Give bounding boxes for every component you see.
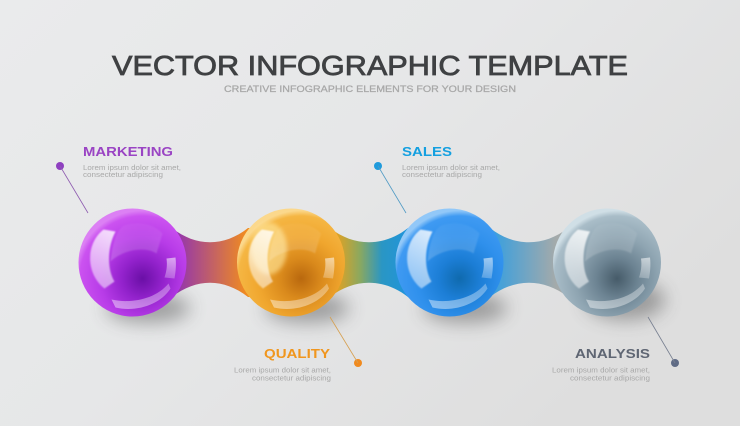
marketing pointer	[56, 162, 88, 213]
quality pointer	[330, 317, 362, 367]
marketing body: consectetur adipiscing	[83, 172, 163, 179]
analysis body: Lorem ipsum dolor sit amet,	[552, 368, 650, 374]
sales pointer	[374, 162, 406, 213]
marketing body	[83, 165, 181, 179]
callout: marketing	[56, 144, 181, 213]
quality heading: QUALITY	[264, 346, 330, 361]
sphere: sales	[396, 208, 504, 316]
sales body: consectetur adipiscing	[402, 172, 482, 179]
analysis body: consectetur adipiscing	[570, 376, 650, 382]
sales body: Lorem ipsum dolor sit amet,	[402, 165, 500, 172]
analysis heading: ANALYSIS	[575, 346, 650, 361]
sales heading: SALES	[402, 144, 452, 159]
quality body	[234, 368, 331, 382]
quality body: consectetur adipiscing	[252, 376, 331, 382]
sphere: marketing	[78, 208, 186, 316]
callout: analysis	[552, 317, 679, 382]
connecting ribbon	[172, 228, 568, 297]
sales body	[402, 165, 500, 179]
sphere shadows	[106, 280, 665, 323]
marketing heading: MARKETING	[83, 144, 173, 159]
subtitle: CREATIVE INFOGRAPHIC ELEMENTS FOR YOUR DESIGN	[224, 84, 516, 95]
callout: sales	[374, 144, 500, 213]
analysis pointer	[648, 317, 679, 367]
quality body: Lorem ipsum dolor sit amet,	[234, 368, 331, 374]
sphere: quality	[237, 208, 345, 316]
sphere: analysis	[553, 208, 661, 316]
callout: quality	[234, 317, 362, 382]
analysis body	[552, 368, 650, 382]
marketing body: Lorem ipsum dolor sit amet,	[83, 165, 181, 172]
title: VECTOR INFOGRAPHIC TEMPLATE	[112, 50, 628, 81]
